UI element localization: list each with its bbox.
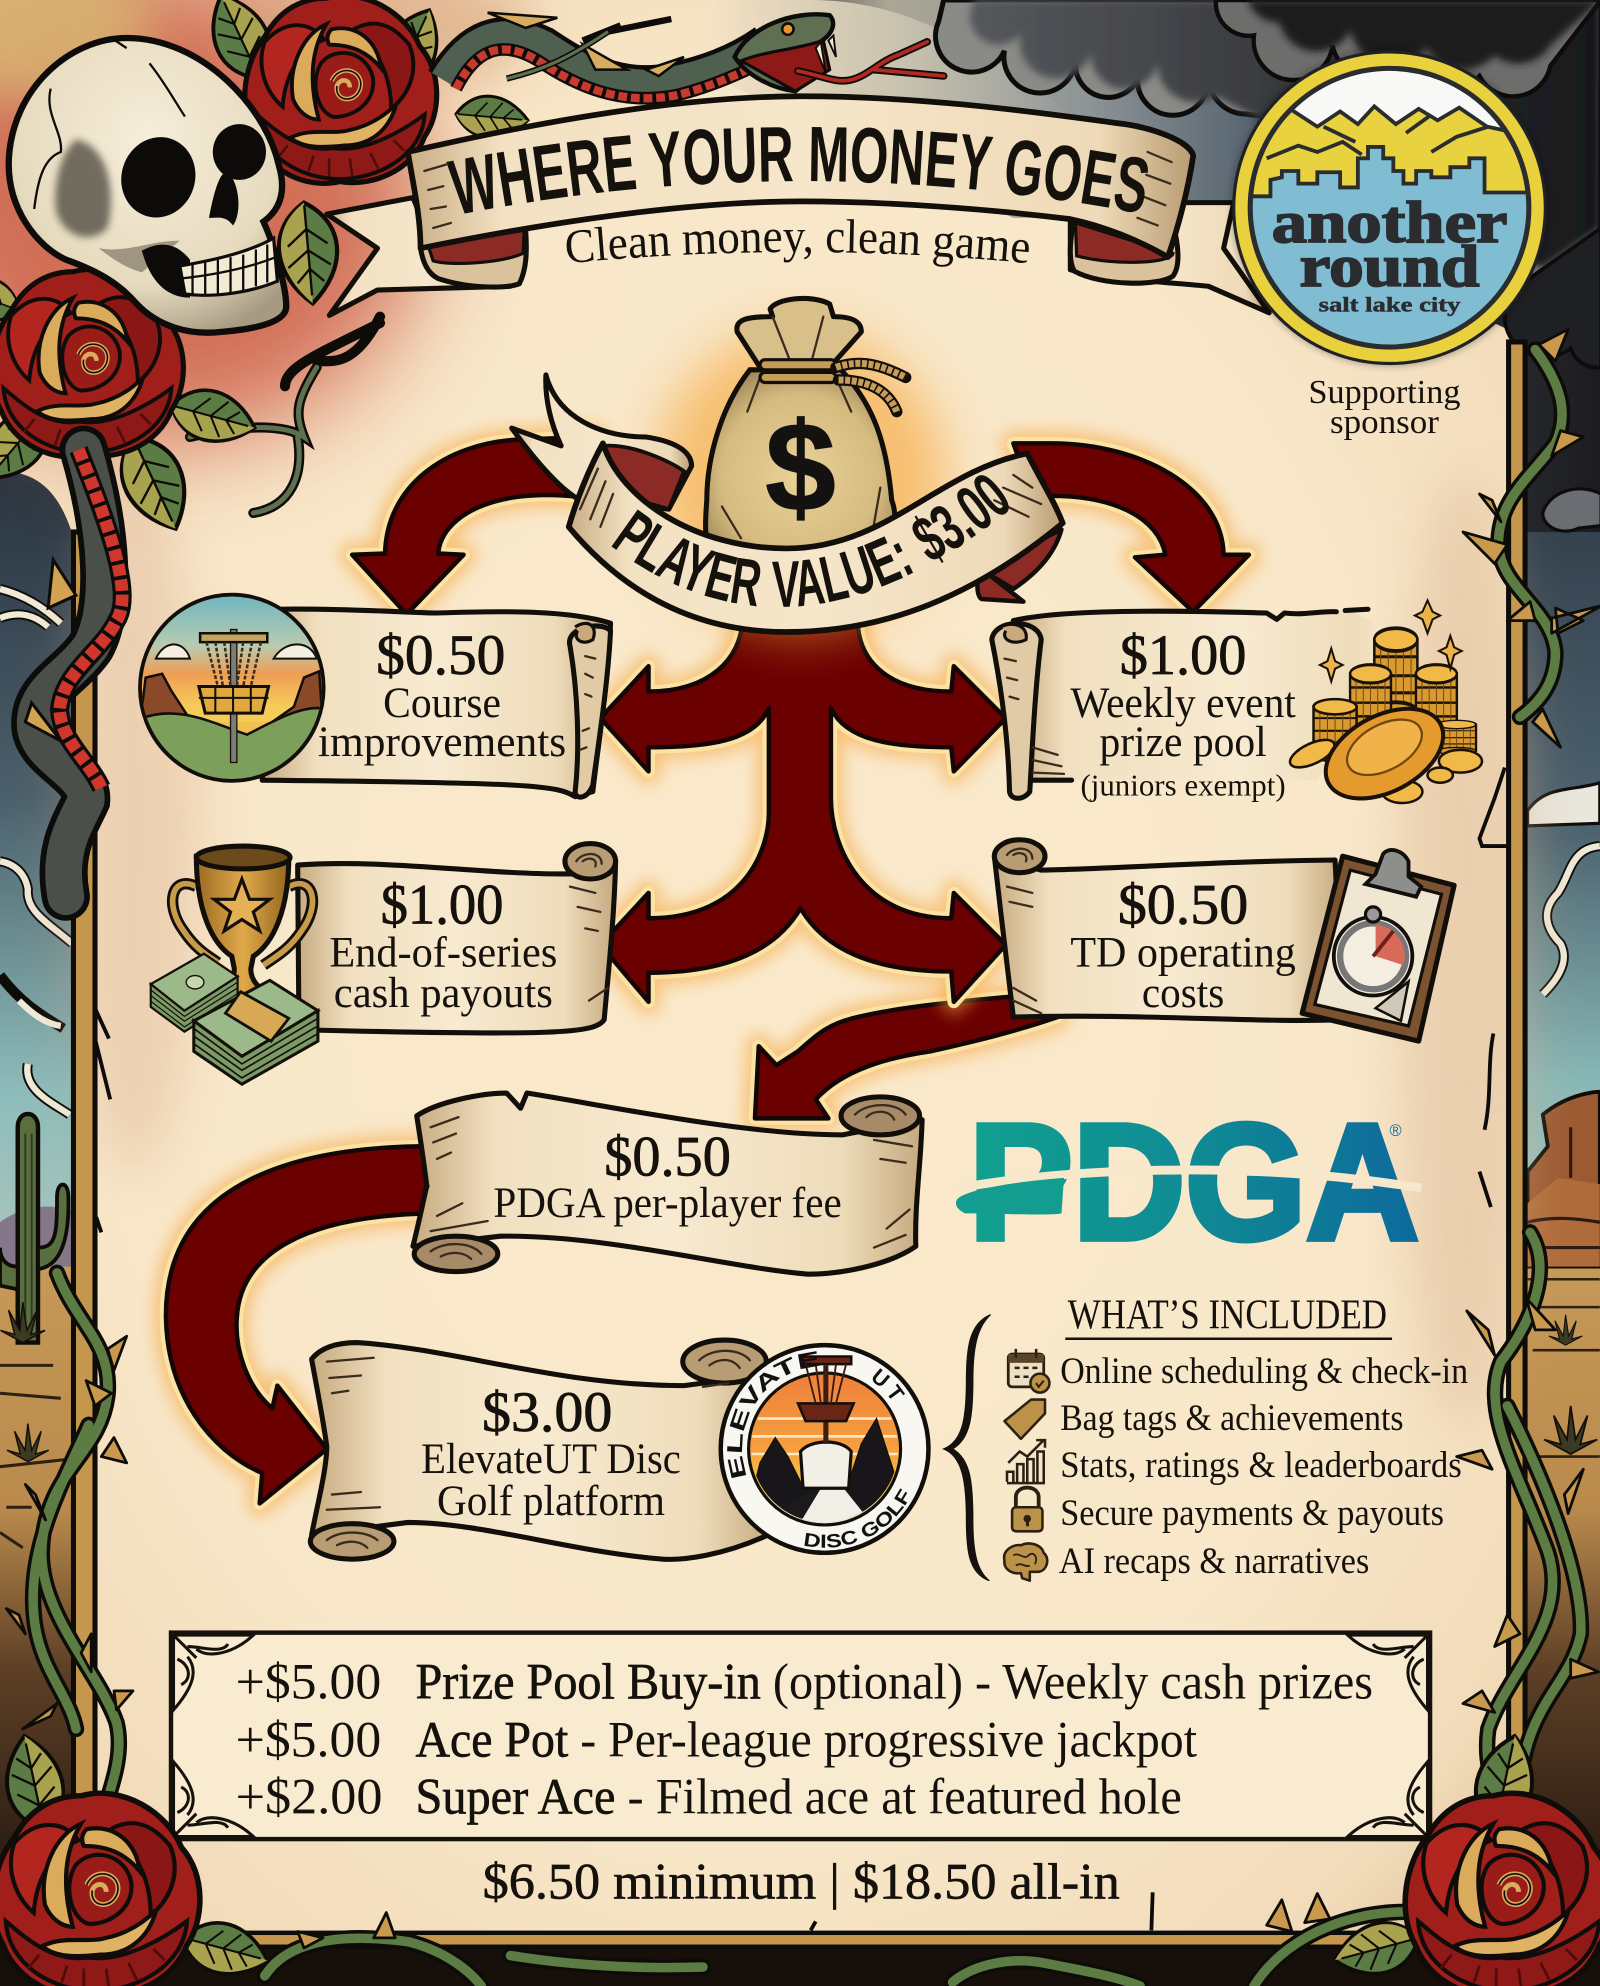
row: prize pool: Prize Pool Buy-in (optional) - Weekly cash prizes [415,1653,1373,1709]
totals line: $6.50 minimum | $18.50 all-in [483,1854,1120,1910]
icon: trophy and cash [151,846,318,1084]
panel: weekly event prize pool: prize pool [1099,719,1267,766]
ElevateUT badge: ELEVATE [727,1351,820,1478]
ribbon left fold [595,446,684,509]
label: Course [383,680,501,727]
arrow: player value to weekly prize pool [1013,443,1249,612]
storm clouds top right [709,0,1600,532]
icon: stats chart [1007,1440,1045,1483]
panel: TD operating costs [994,840,1454,1041]
ElevateUT badge [718,1342,931,1555]
item: Online scheduling & check-in [1060,1350,1468,1391]
ribbon right fold [977,529,1061,602]
rose: left [0,269,183,457]
thorn vines: left and bottom [6,1273,703,1986]
banner right fold [1075,223,1173,262]
banner left tail [327,198,526,315]
supporting sponsor caption: sponsor [1330,404,1440,441]
item: Stats, ratings & leaderboards [1060,1444,1462,1485]
desert scene right [1526,1092,1600,1457]
skull [9,38,286,333]
row: prize pool: +$5.00 [236,1653,381,1709]
row: ace pot: Ace Pot - Per-league progressive jackpot [415,1712,1197,1768]
icon: bag tag [1004,1400,1045,1439]
dollar sign: $ [765,395,836,537]
snake: top [443,13,944,98]
title banner: WHERE YOUR MONEY GOES [446,127,1148,214]
red ink spray behind skull [0,0,1533,1431]
lightning and clouds on side panels [0,589,1600,1115]
list heading: WHAT’S INCLUDED [1068,1293,1387,1339]
label: TD operating [1070,929,1296,976]
icon: disc golf basket landscape [139,595,327,785]
ribbon left tail [512,375,692,509]
badge ring text [742,1366,907,1477]
subtitle [566,252,1030,263]
amount: $0.50 [604,1125,731,1188]
panel: end-of-series cash payouts: cash payouts [334,970,553,1017]
ribbon main [569,443,1063,632]
icon: coins and golden disc [1286,600,1482,817]
what's included list [1004,1293,1468,1581]
banner right tail [1070,203,1269,313]
banner left roll [421,231,526,287]
banner left fold [428,223,524,263]
arrow: central four-way branch [600,621,1006,1002]
label: ElevateUT Disc [421,1436,681,1483]
amount: $0.50 [1118,873,1248,936]
arrow: TD costs to PDGA fee [755,994,1058,1118]
banner right roll [1070,215,1178,283]
amount: $3.00 [482,1381,612,1444]
panel: weekly event prize pool [992,600,1482,817]
panel: end-of-series cash payouts [151,844,616,1084]
PDGA logo: ® [1390,1122,1402,1140]
row: super ace: +$2.00 [236,1769,383,1825]
title text [456,181,1150,215]
badge basket [798,1357,854,1444]
row: ace pot: +$5.00 [236,1712,381,1768]
bottom leaves [0,1730,1542,1984]
arrow: player value to course improvements [352,437,595,614]
icon: clipboard and stopwatch [1302,850,1454,1041]
item: Secure payments & payouts [1060,1492,1444,1533]
sponsor badge: another round: salt lake city [1319,293,1461,317]
amount: $0.50 [376,624,505,687]
icon: calendar [1008,1349,1049,1393]
icon: padlock [1012,1488,1042,1531]
corner ornaments [174,1635,1428,1837]
snake: left side [25,450,122,897]
panel: course improvements: improvements [318,719,566,766]
player value ribbon [509,372,1066,635]
desert scene left [0,1114,79,1548]
thorn vine top-left below skull [190,317,380,513]
label: End-of-series [329,929,557,976]
ribbon text [609,512,1007,607]
item: Bag tags & achievements [1060,1397,1403,1438]
icon: brain [1004,1544,1047,1581]
supporting sponsor caption: Supporting [1308,374,1460,411]
panel: course improvements [139,595,611,797]
rose: bottom right [1405,1793,1600,1986]
rose: top [245,0,437,183]
ElevateUT badge: DISC GOLF [804,1488,908,1548]
arrow: PDGA fee to platform [166,1146,431,1503]
sponsor name: another [1272,189,1507,255]
panel: ElevateUT platform [310,1340,773,1559]
ElevateUT badge: UT [872,1368,905,1399]
panel: weekly event prize pool: (juniors exempt) [1080,768,1286,802]
add-ons box [171,1633,1430,1839]
panel: PDGA per-player fee [413,1093,922,1274]
rose: bottom left [0,1793,200,1986]
rose leaves top-left cluster [0,0,530,541]
title banner: Clean money, clean game [566,219,1029,267]
banner main ribbon [408,96,1193,257]
title banner [324,93,1272,318]
sponsor badge: another round [1229,49,1558,367]
panel: TD operating costs: costs [1142,970,1224,1017]
player value ribbon: PLAYER VALUE: $3.00 [612,475,1009,607]
amount: $1.00 [381,873,503,936]
item: AI recaps & narratives [1059,1540,1369,1581]
thorn vines: right side [953,329,1600,1986]
label: Weekly event [1070,680,1296,727]
money bag with glow [655,298,946,633]
parchment frame [73,342,1525,1951]
PDGA logo: PDGA [969,1090,1419,1274]
brace [944,1315,991,1581]
supporting sponsor caption [1308,374,1460,441]
row: super ace: Super Ace - Filmed ace at featured hole [415,1769,1182,1825]
sponsor badge: another round: round [1300,233,1479,299]
amount: $1.00 [1120,624,1246,687]
panel: ElevateUT platform: Golf platform [437,1478,665,1525]
label: PDGA per-player fee [493,1180,842,1227]
